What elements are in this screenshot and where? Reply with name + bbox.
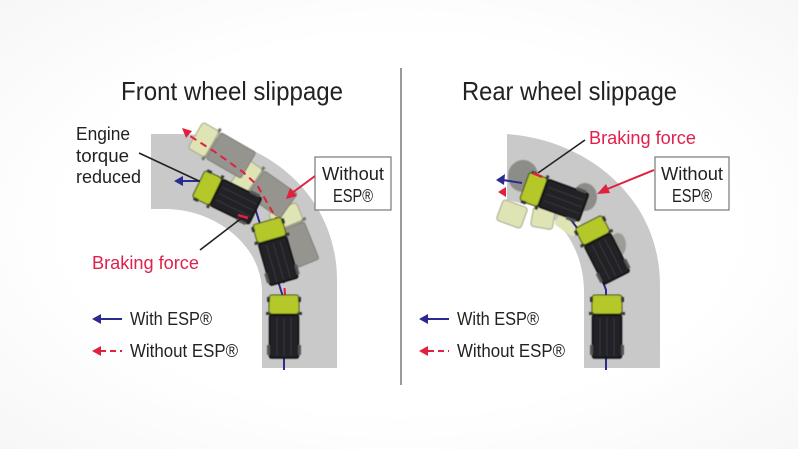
leader: engine torque (139, 153, 199, 181)
legend: front panel: Without ESP® (130, 341, 238, 361)
ghost cars: without ESP path (186, 119, 322, 271)
arrow: without ESP dashed path (190, 136, 285, 295)
label: braking force: Braking force (92, 253, 199, 273)
legend: front panel (92, 309, 238, 361)
road: left curve (151, 134, 337, 368)
path: with ESP line (215, 195, 284, 370)
arrow: with ESP direction (182, 180, 200, 182)
road: right curve (507, 134, 660, 368)
callout: without ESP: ESP® (672, 186, 712, 206)
label: engine torque reduced: torque (76, 146, 129, 166)
label: engine torque reduced (76, 124, 141, 187)
title: rear wheel slippage: Rear wheel slippage (462, 76, 677, 106)
callout: without ESP: Without (322, 164, 384, 184)
callout: without ESP: Without (661, 164, 723, 184)
callout: without ESP (315, 157, 391, 210)
callout: without ESP: ESP® (333, 186, 373, 206)
panel: rear wheel slippage diagram (419, 128, 729, 370)
leader: braking force (538, 140, 585, 173)
marker: braking point (238, 215, 248, 218)
arrow: without ESP direction (498, 187, 506, 197)
path: with ESP line (530, 190, 606, 370)
legend: front panel: With ESP® (130, 309, 212, 329)
marker: braking point (533, 173, 542, 177)
cars: with ESP path (191, 167, 302, 358)
label: engine torque reduced: reduced (76, 167, 141, 187)
legend: rear panel (419, 309, 565, 361)
arrow: with ESP direction (503, 180, 522, 183)
callout: without ESP (655, 157, 729, 210)
arrow: callout pointer (605, 170, 654, 190)
arrow: callout pointer (292, 176, 315, 193)
legend: rear panel: With ESP® (457, 309, 539, 329)
title: front wheel slippage: Front wheel slippage (121, 76, 343, 106)
legend: rear panel: Without ESP® (457, 341, 565, 361)
ghost cars: without ESP spin (496, 160, 626, 257)
panel: front wheel slippage diagram (76, 119, 391, 370)
divider (400, 68, 402, 385)
label: braking force: Braking force (589, 128, 696, 148)
label: engine torque reduced: Engine (76, 124, 130, 144)
cars: with ESP path (518, 169, 633, 358)
leader: braking force (200, 217, 243, 250)
